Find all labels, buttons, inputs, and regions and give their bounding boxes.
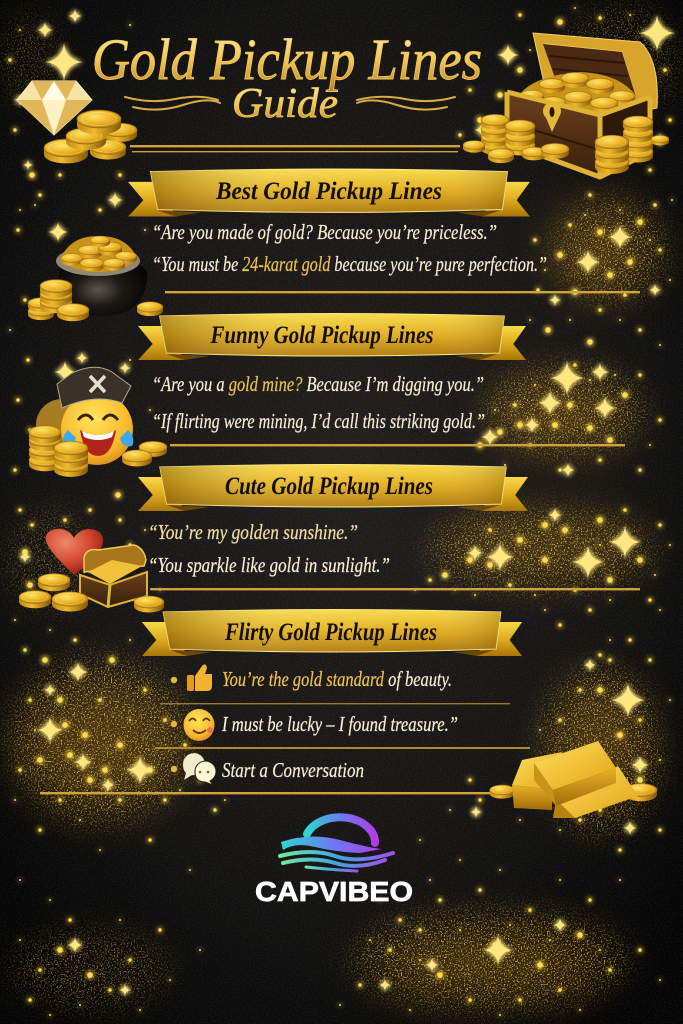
panel: funny gold pickup lines: [45, 314, 635, 446]
banner: Cute Gold Pickup Lines: [225, 473, 433, 500]
section rule: [40, 792, 490, 794]
icon: heart and small chest: [19, 529, 164, 612]
quote lines: “You sparkle like gold in sunlight.”: [148, 553, 390, 577]
banner: [142, 610, 522, 656]
quote lines: “Are you made of gold? Because you’re priceless.”: [152, 220, 497, 244]
banner: [138, 464, 528, 511]
icon: thumbs up: [187, 664, 212, 691]
quote lines: [152, 372, 485, 433]
section rule: [165, 291, 640, 293]
banner rules: [45, 491, 640, 493]
icon: treasure chest: [463, 33, 669, 177]
section rule: [170, 444, 625, 446]
quote lines: [148, 520, 390, 577]
quote lines: “You’re my golden sunshine.”: [148, 520, 358, 544]
banner: Best Gold Pickup Lines: [215, 178, 442, 205]
title flourishes: [125, 97, 455, 110]
divider: [155, 747, 530, 749]
list item: gold standard: [171, 664, 452, 691]
banner: [138, 314, 526, 360]
wordmark: CAPVIBEO: [255, 876, 413, 907]
list item: lucky: [171, 709, 458, 741]
banner rules: [45, 199, 640, 201]
banner: Funny Gold Pickup Lines: [210, 322, 434, 349]
icon: smiling face: [184, 709, 214, 741]
title: Gold Pickup Lines: [92, 27, 482, 92]
panel: flirty gold pickup lines: [38, 610, 640, 794]
list item: conversation: Start a Conversation: [222, 758, 364, 782]
icon: diamond and coins: [17, 81, 137, 163]
list item: lucky: I must be lucky – I found treasure.”: [221, 712, 458, 736]
banner rules: [38, 636, 640, 638]
title: [92, 27, 482, 127]
banner: Flirty Gold Pickup Lines: [224, 619, 437, 646]
quote lines: “You must be 24-karat gold because you’re pure perfection.”: [152, 252, 547, 276]
icon: gold bars: [490, 741, 657, 818]
quote lines: “Are you a gold mine? Because I’m digging you.”: [152, 372, 484, 396]
title rule: [130, 145, 460, 152]
banner rules: [45, 341, 635, 343]
panel: best gold pickup lines: [45, 169, 640, 293]
section rule: [150, 588, 640, 590]
quote lines: “If flirting were mining, I’d call this striking gold.”: [152, 409, 485, 433]
divider: [160, 703, 510, 704]
icon: chat bubbles: [183, 753, 216, 785]
quote lines: [152, 220, 547, 276]
logo mark: [280, 817, 393, 871]
title: Guide: [232, 81, 338, 127]
icon: pot of gold: [28, 236, 163, 321]
icon: pirate laughing emoji: [29, 367, 167, 477]
list item: conversation: [171, 753, 364, 785]
banner: [128, 169, 530, 216]
panel: cute gold pickup lines: [45, 464, 640, 590]
list item: gold standard: You’re the gold standard of beauty.: [222, 667, 452, 691]
logo: capvibeo: [255, 817, 413, 907]
